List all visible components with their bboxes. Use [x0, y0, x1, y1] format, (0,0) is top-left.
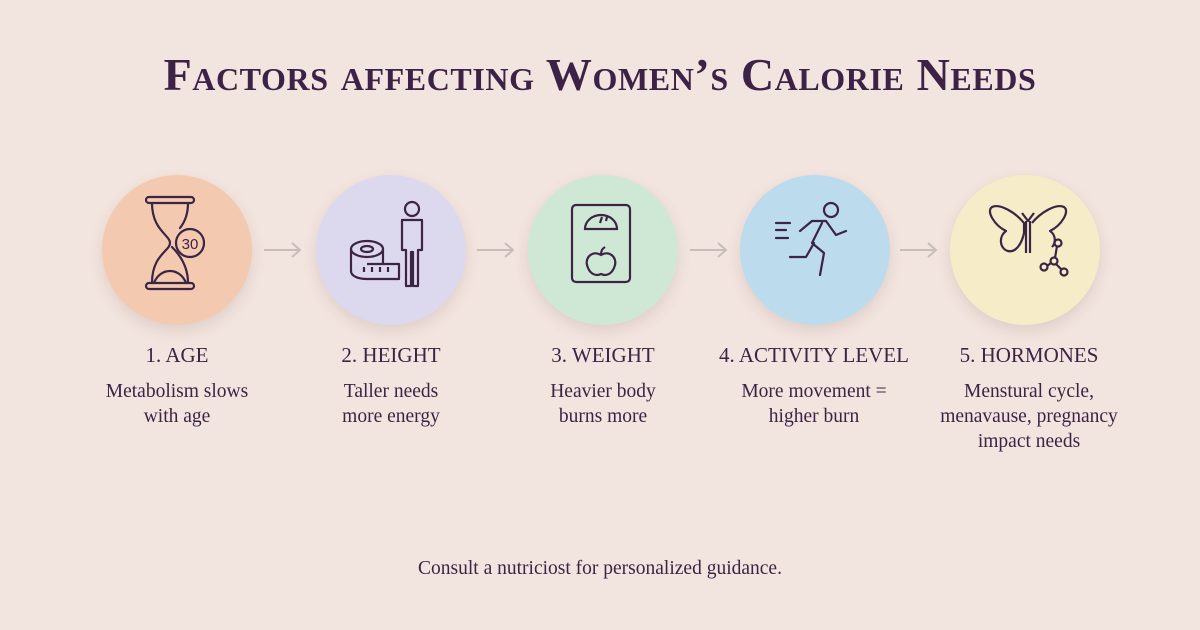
icon: height circle	[316, 175, 466, 325]
title: Factors affecting Women’s Calorie Needs	[164, 49, 1036, 100]
text: Heavier body	[550, 381, 656, 402]
text: More movement =	[741, 381, 887, 402]
factor 5 text	[940, 343, 1118, 452]
text: 4. ACTIVITY LEVEL	[719, 343, 909, 367]
text: burns more	[559, 406, 647, 427]
text: menavause, pregnancy	[940, 406, 1118, 427]
text: more energy	[342, 406, 440, 427]
factor 4 text	[719, 343, 909, 427]
text: Menstural cycle,	[964, 381, 1094, 402]
factor 1 text	[106, 343, 248, 427]
text: Taller needs	[344, 381, 438, 402]
arrow	[900, 242, 938, 258]
text: with age	[144, 406, 210, 427]
icon: activity circle	[740, 175, 890, 325]
arrow	[264, 242, 302, 258]
text: higher burn	[769, 406, 859, 427]
text: Metabolism slows	[106, 381, 248, 402]
text: 5. HORMONES	[960, 343, 1098, 367]
arrow	[690, 242, 728, 258]
text: impact needs	[978, 431, 1080, 452]
footer note: Consult a nutriciost for personalized guidance.	[418, 558, 782, 579]
text: 1. AGE	[146, 343, 208, 367]
icon: weight circle	[528, 175, 678, 325]
arrow	[477, 242, 514, 258]
icon: age circle	[102, 175, 252, 325]
icon: hormones circle	[950, 175, 1100, 325]
factor 3 text	[550, 343, 656, 427]
factor 2 text	[341, 343, 441, 427]
text: 2. HEIGHT	[341, 343, 441, 367]
text: 3. WEIGHT	[551, 343, 655, 367]
icon: age circle: 30	[182, 236, 198, 253]
